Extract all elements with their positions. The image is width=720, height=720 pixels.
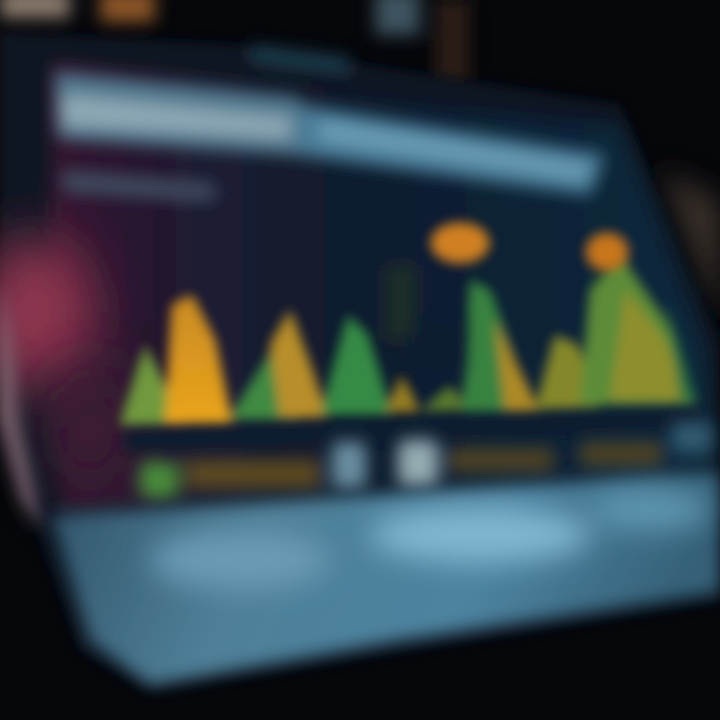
peak 5 [535,335,600,410]
amber peak 1 [165,295,232,424]
background objects at top [0,0,470,85]
legend: label 3 [580,442,662,466]
subtitle [62,170,215,202]
legend: label 2 [448,448,553,472]
chart: peaks [120,255,695,425]
green peak 2 [228,345,300,420]
lower band highlights [150,490,710,590]
green peak 1 [120,345,185,425]
chart: dark figure overlay [385,265,462,375]
crimson glow at left [0,235,95,395]
tablet right edge reflection [660,170,720,320]
left bright edge [0,285,40,530]
amber slope 4 [495,320,540,412]
legend: label 1 [185,460,320,488]
green peak 3 [320,315,392,415]
amber peak 2 [270,310,328,418]
chart: orange highlight markers [431,223,628,271]
legend: white items [332,442,366,488]
panel: lower light-blue band [52,472,720,685]
green tall peak 4 [462,280,515,412]
legend row [140,422,712,498]
low amber [385,375,420,412]
peak 6 [580,255,695,405]
chart: axis band [125,408,705,452]
title band [55,45,605,195]
legend: green swatch [140,462,178,498]
panel: screen [50,60,715,510]
legend: end item [672,422,712,452]
